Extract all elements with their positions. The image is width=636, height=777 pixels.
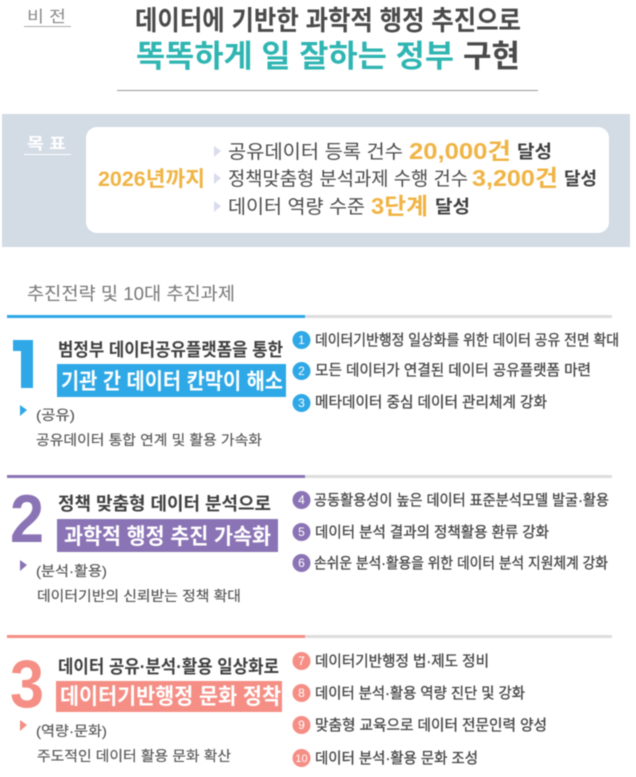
task 3: 메타데이터 중심 데이터 관리체계 강화 [315, 394, 547, 411]
strategy 1 description: (공유) [36, 407, 75, 423]
strategy 2 heading: 정책 맞춤형 데이터 분석으로 [58, 494, 271, 514]
task 1: 1 [298, 333, 305, 347]
goal 2: 정책맞춤형 분석과제 수행 건수 [228, 168, 468, 190]
title: 데이터에 기반한 과학적 행정 추진으로 [135, 6, 521, 36]
numeral 3: 3 [10, 646, 44, 722]
goals label: 목 표 [27, 136, 66, 153]
strategy 2 highlight: 과학적 행정 추진 가속화 [64, 524, 271, 549]
goal 3: 달성 [435, 197, 470, 217]
task 7: 7 [298, 654, 305, 668]
goal 3: 3단계 [371, 193, 428, 219]
strategy 1 highlight [57, 364, 286, 397]
goal 2 [214, 165, 597, 191]
goals card [86, 127, 609, 233]
task 6: 손쉬운 분석·활용을 위한 데이터 분석 지원체계 강화 [314, 555, 608, 572]
task 3: 3 [298, 396, 305, 410]
task 2: 2 [298, 364, 305, 378]
strategy 3 description [20, 720, 231, 764]
task 10: 10 [295, 753, 308, 765]
goal 1: 20,000건 [409, 138, 511, 164]
title [135, 6, 521, 74]
goal 1 [214, 138, 552, 164]
goal 1: 공유데이터 등록 건수 [228, 141, 403, 163]
goals label [24, 136, 71, 155]
numeral 1 [13, 340, 33, 388]
task 8: 8 [298, 686, 305, 700]
strategy 3 highlight: 데이터기반행정 문화 정착 [60, 684, 281, 709]
task 1: 데이터기반행정 일상화를 위한 데이터 공유 전면 확대 [315, 332, 619, 349]
deadline: 2026년까지 [98, 168, 205, 191]
goal 1: 달성 [517, 142, 552, 162]
panel: goals [2, 114, 630, 247]
strategy 1 heading: 범정부 데이터공유플랫폼을 통한 [58, 340, 283, 360]
task 5: 데이터 분석 결과의 정책활용 환류 강화 [315, 524, 549, 541]
strategy 3 description: 주도적인 데이터 활용 문화 확산 [37, 748, 231, 764]
numeral 2: 2 [10, 481, 44, 557]
goal 2: 달성 [564, 169, 597, 189]
panel: strategy 3 [7, 635, 612, 767]
goal 2: 3,200건 [472, 165, 558, 191]
strategy 1 description [20, 405, 262, 448]
panel: strategy 2 [7, 475, 612, 604]
goal 3 [214, 193, 470, 219]
title: 구현 [463, 39, 520, 74]
task 5: 5 [298, 525, 305, 539]
strategy 3 description: (역량·문화) [36, 723, 107, 739]
task 6: 6 [298, 556, 305, 570]
vision label [24, 8, 71, 27]
task 10: 데이터 분석·활용 문화 조성 [315, 750, 478, 767]
vision label: 비 전 [27, 8, 66, 26]
strategy 2 description: (분석·활용) [36, 563, 107, 579]
strategy 3 heading: 데이터 공유·분석·활용 일상화로 [58, 657, 279, 677]
title: 똑똑하게 일 잘하는 정부 [136, 39, 454, 74]
strategy 2 description [20, 560, 241, 604]
strategy 1 highlight: 기관 간 데이터 칸막이 해소 [61, 369, 283, 394]
task 9: 9 [298, 718, 305, 732]
task 4: 4 [298, 493, 305, 507]
task 7: 데이터기반행정 법·제도 정비 [315, 653, 489, 670]
strategy 1 description: 공유데이터 통합 연계 및 활용 가속화 [36, 432, 262, 448]
task 9: 맞춤형 교육으로 데이터 전문인력 양성 [315, 717, 547, 734]
task 8: 데이터 분석·활용 역량 진단 및 강화 [315, 685, 525, 702]
strategy 2 description: 데이터기반의 신뢰받는 정책 확대 [37, 588, 241, 604]
goal 3: 데이터 역량 수준 [228, 196, 365, 218]
task 2: 모든 데이터가 연결된 데이터 공유플랫폼 마련 [315, 362, 591, 379]
section heading: 추진전략 및 10대 추진과제 [27, 284, 235, 304]
task 4: 공동활용성이 높은 데이터 표준분석모델 발굴·활용 [314, 492, 609, 509]
panel: strategy 1 [7, 315, 619, 448]
